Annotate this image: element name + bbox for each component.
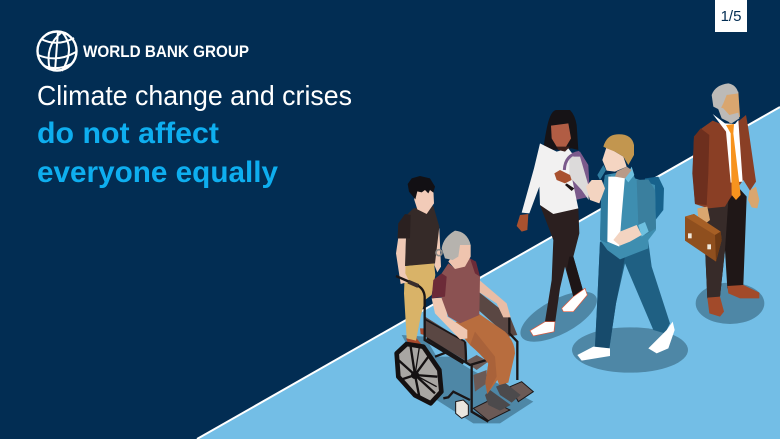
page number badge: 1/5 [721,8,741,25]
strap [597,165,606,180]
shirt [442,258,480,323]
face [551,123,571,148]
shadow [696,283,764,324]
title line 3: everyone equally [37,156,278,189]
cuff [638,222,649,237]
briefcase [685,214,722,262]
face [602,147,627,172]
backpack [562,152,590,200]
shadow [572,327,688,373]
shoes [485,390,511,411]
hair [543,110,578,150]
trousers [452,314,515,394]
shoes [562,288,587,312]
logo: World Bank Group [38,31,249,71]
icon: globe [38,31,76,71]
floor: light blue walkway [197,107,780,439]
backpack [643,177,664,221]
figure: older man with briefcase [685,83,764,324]
shirt [713,114,743,183]
seated woman [432,231,521,411]
boy [396,176,441,347]
trousers [595,242,670,348]
hand left [517,214,528,232]
hand raised [586,180,605,203]
backpack strap [564,152,579,170]
title line 1: Climate change and crises [37,80,352,111]
wheelchair shadow [402,335,533,423]
hand left [697,207,710,224]
shirt [607,177,625,247]
head [448,245,471,269]
wheelchair [396,276,533,422]
tie [726,124,741,200]
logo wordmark: WORLD BANK GROUP [83,42,249,61]
shoes [577,347,610,361]
shoes [727,285,759,298]
page number badge [715,0,747,32]
neck [615,167,632,178]
hand right [748,187,759,208]
shirt [522,143,578,214]
beard [717,107,739,123]
hair [712,83,738,110]
trousers [540,205,583,323]
jacket [693,115,756,208]
hand front [613,225,642,246]
arms [432,297,467,339]
hand on strap [554,170,572,183]
trousers [705,180,747,298]
collar [625,167,634,182]
hair [603,134,634,165]
figure: walking man with backpack [572,134,688,373]
title line 2: do not affect [37,117,219,150]
arm [569,157,589,200]
figure: walking woman [513,110,604,352]
title [37,80,352,189]
shadow [513,281,604,352]
jacket [600,170,656,259]
face [720,92,740,123]
figure: boy pushing woman in wheelchair [396,176,533,423]
wheelchair wheel [397,344,441,403]
